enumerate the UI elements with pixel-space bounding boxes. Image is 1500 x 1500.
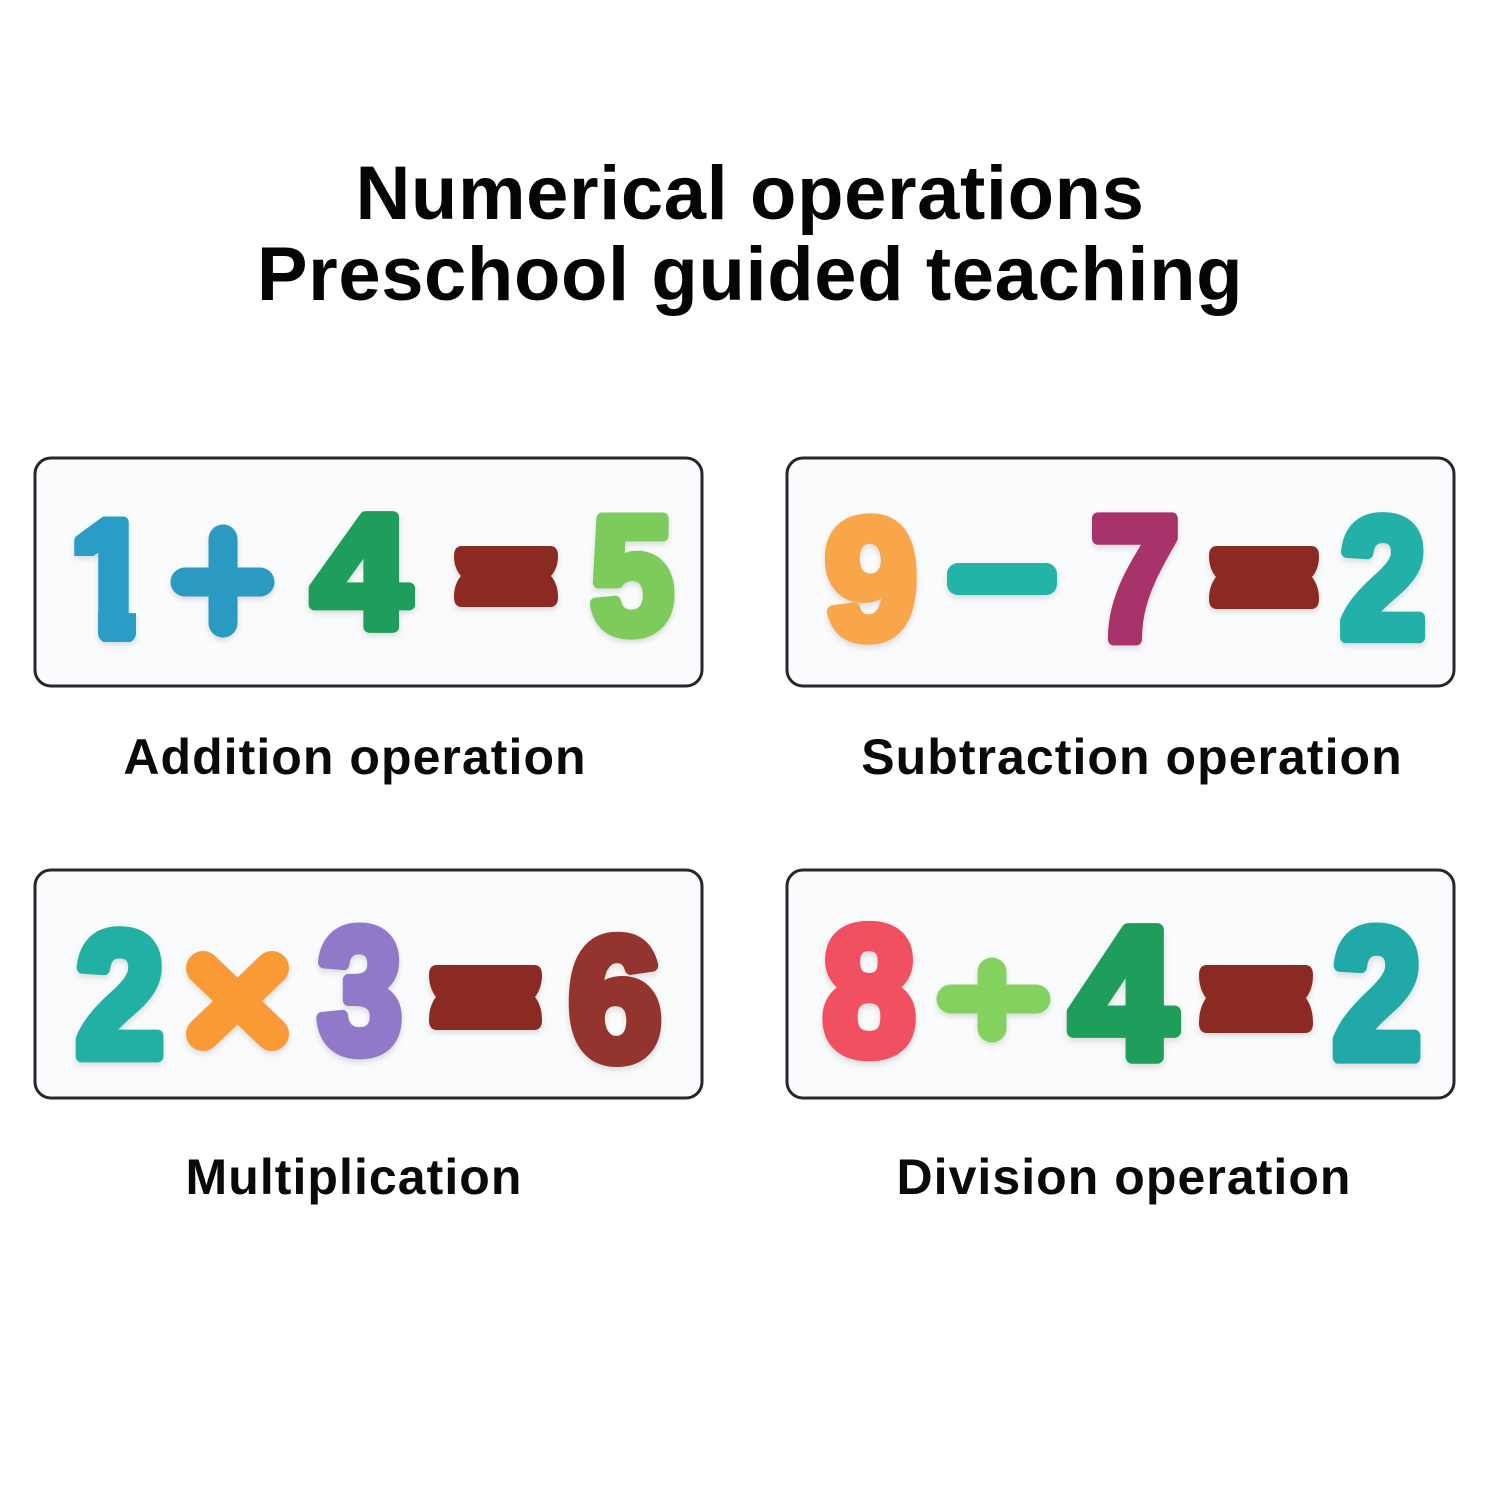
equals block: [454, 546, 558, 607]
digit 8: 8: [823, 890, 915, 1092]
title: [257, 151, 1243, 317]
digit 2: 2: [1333, 892, 1421, 1097]
division sign: [951, 972, 1036, 1028]
label: subtraction: Subtraction operation: [861, 729, 1403, 785]
panel: multiplication: [35, 870, 702, 1098]
title: Numerical operations: [355, 151, 1145, 236]
title: Preschool guided teaching: [257, 232, 1243, 317]
digit 5: 5: [591, 484, 673, 668]
digit 1: 1: [70, 486, 150, 671]
panel: subtraction: [787, 458, 1454, 686]
panel: division: [787, 870, 1454, 1098]
digit 4: 4: [312, 482, 410, 661]
digit 7: 7: [1091, 482, 1179, 677]
minus sign: [947, 563, 1057, 595]
panel: addition: [35, 458, 702, 686]
digit 3: 3: [318, 892, 402, 1089]
label: multiplication: Multiplication: [186, 1149, 522, 1205]
equals block: [1209, 546, 1319, 609]
equals block: [1199, 965, 1313, 1033]
label: addition: Addition operation: [123, 729, 587, 785]
digit 9: 9: [825, 486, 917, 673]
digit 4: 4: [1071, 890, 1175, 1097]
plus sign: [185, 539, 260, 623]
digit 2: 2: [1340, 484, 1426, 674]
digit 6: 6: [569, 903, 661, 1097]
equals block: [429, 965, 542, 1030]
label: division: Division operation: [896, 1149, 1352, 1205]
times sign: [203, 968, 272, 1034]
digit 2: 2: [76, 896, 164, 1094]
